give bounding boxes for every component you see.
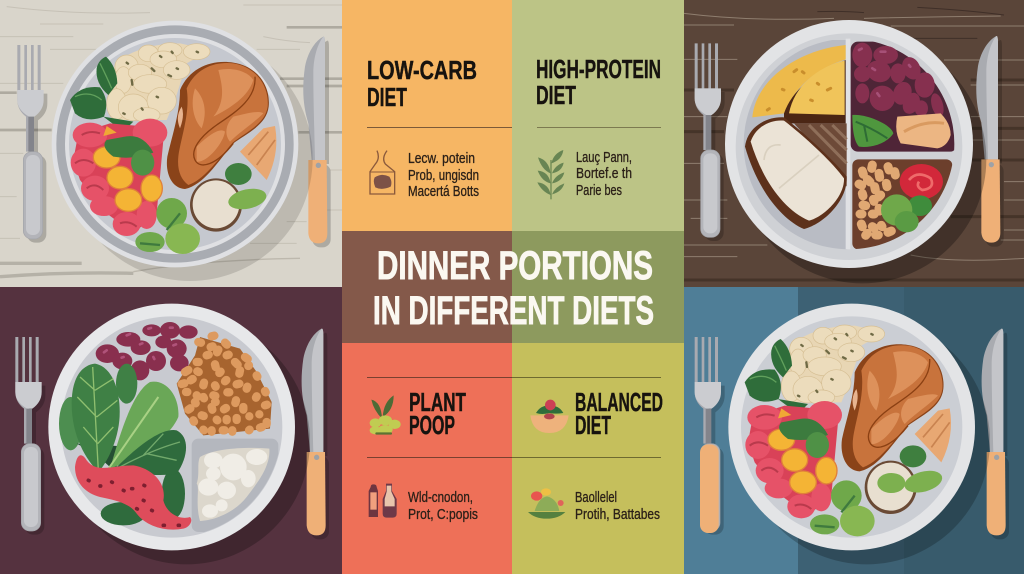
icon: fork — [695, 337, 725, 535]
panel: high-protein plate on dark wood — [684, 0, 1024, 288]
panel: high-protein diet — [512, 0, 684, 232]
text: high-protein notes: Bortef.e th — [576, 166, 632, 182]
heading: plant poop: POOP — [409, 410, 455, 440]
icon: fork — [15, 337, 45, 535]
icon: jar — [370, 151, 395, 194]
heading: balanced diet — [575, 387, 663, 440]
panel: balanced plate on blue background — [684, 287, 1024, 574]
icon: knife — [303, 37, 331, 247]
icon: side leaf — [226, 186, 268, 212]
text: low-carb notes — [408, 151, 479, 200]
plate — [52, 21, 313, 281]
plate — [725, 20, 986, 283]
text: low-carb notes: Prob, ungisdn — [408, 168, 479, 184]
text: low-carb notes: Lecw. potein — [408, 151, 475, 167]
title: IN DIFFERENT DIETS — [373, 289, 654, 333]
plate — [48, 304, 310, 564]
text: high-protein notes: Lauç Pann, — [576, 150, 632, 166]
food: chicken, pasta, tomato salad and greens — [745, 325, 951, 536]
text: balanced notes: Protih, Battabes — [575, 507, 660, 523]
panel: low-carb diet — [342, 0, 512, 232]
icon: salad bowl — [530, 400, 569, 433]
icon: fork — [17, 45, 47, 243]
text: plant notes: Prot, C:popis — [408, 507, 478, 523]
icon: sprout on greens — [370, 395, 401, 435]
panel: low-carb plate on light wood — [0, 0, 342, 288]
heading: low-carb diet: DIET — [367, 82, 407, 112]
heading: low-carb diet — [367, 55, 477, 112]
text: low-carb notes: Macertá Botts — [408, 184, 479, 200]
icon: fork — [695, 43, 725, 241]
panel: title band — [342, 231, 684, 343]
icon: knife — [302, 329, 329, 539]
icon: leaf sprig — [537, 150, 564, 199]
heading: high-protein diet: HIGH-PROTEIN — [536, 54, 661, 84]
food: chicken, pasta, tomato salad and greens — [70, 43, 276, 254]
icon: knife — [976, 36, 1004, 247]
plate — [728, 304, 990, 564]
heading: low-carb diet: LOW-CARB — [367, 55, 477, 85]
text: plant notes: Wld-cnodon, — [408, 490, 473, 506]
heading: plant poop: PLANT — [409, 387, 466, 417]
panel: balanced diet — [512, 343, 684, 574]
text: high-protein notes: Parie bes — [576, 183, 622, 199]
text: balanced notes — [575, 490, 660, 523]
icon: leaves on sauce cup — [877, 467, 945, 496]
title — [373, 244, 654, 333]
icon: salad mound — [528, 488, 565, 519]
heading: plant poop — [409, 387, 466, 440]
heading: balanced diet: BALANCED — [575, 387, 663, 417]
food: greens, beans, red pepper and grains — [59, 322, 278, 532]
icon: bottles — [369, 484, 397, 518]
text: balanced notes: Baollelel — [575, 490, 617, 506]
heading: balanced diet: DIET — [575, 410, 611, 440]
panel: plant plate on plum background — [0, 287, 342, 574]
heading: high-protein diet: DIET — [536, 80, 576, 110]
text: plant notes — [408, 490, 478, 523]
title: DINNER PORTIONS — [377, 244, 653, 288]
text: high-protein notes — [576, 150, 632, 199]
panel: plant diet — [342, 343, 512, 574]
icon: knife — [982, 329, 1009, 539]
heading: high-protein diet — [536, 54, 661, 110]
food: bread, meat and sides in compartments — [741, 37, 957, 253]
